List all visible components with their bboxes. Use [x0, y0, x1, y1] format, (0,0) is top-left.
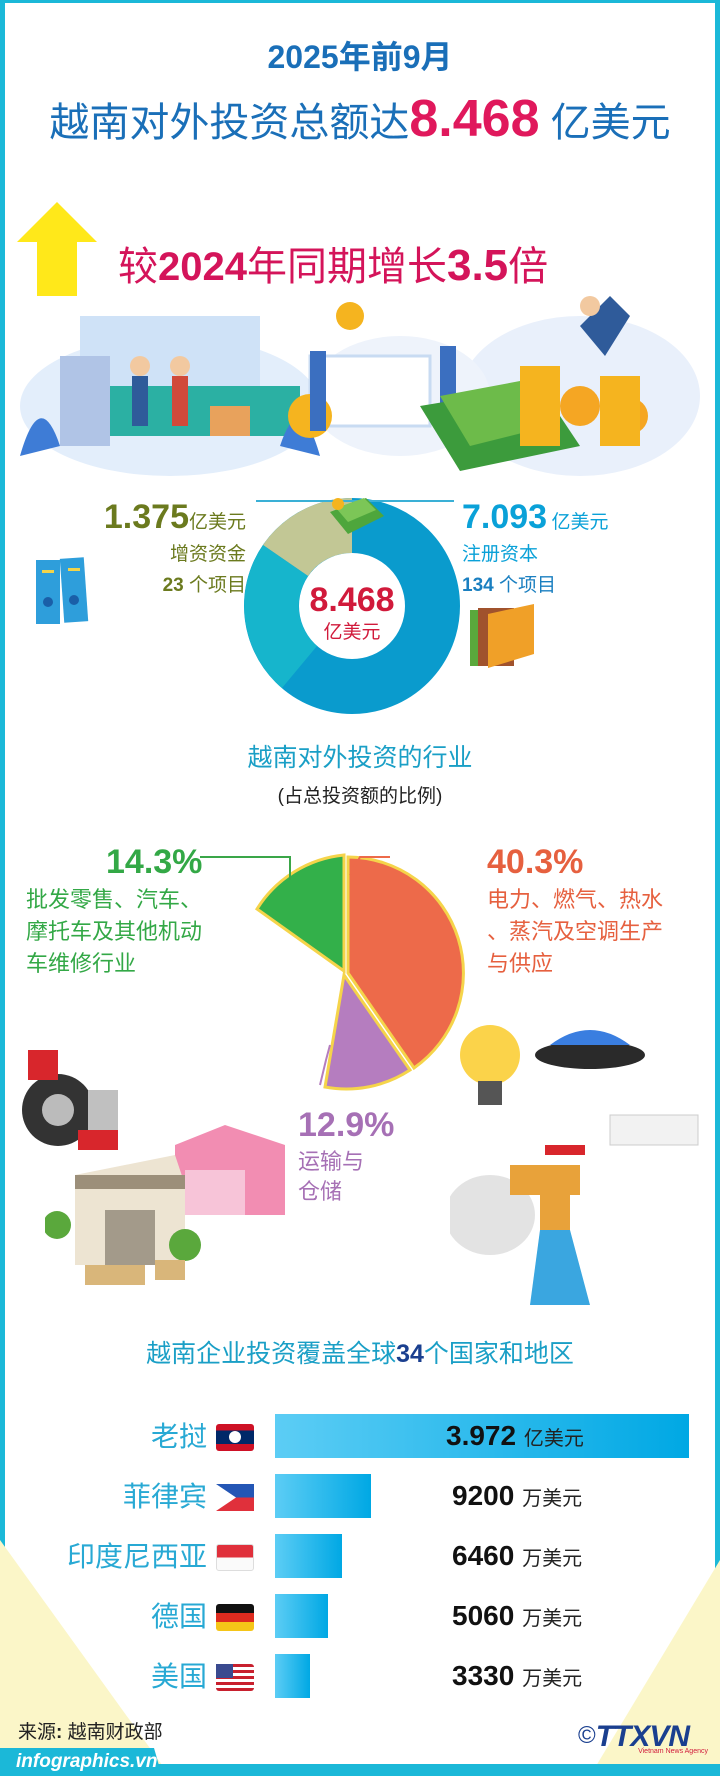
- row: Germany: [151, 1594, 582, 1638]
- right stat: registered capital: 134 个项目: [462, 575, 556, 596]
- donut center value: 亿美元: [323, 621, 381, 643]
- logo: TTXVN: ©TTXVN: [578, 1720, 689, 1753]
- icon: warehouse: [45, 1125, 285, 1285]
- label: transport 12.9%: 仓储: [298, 1179, 342, 1204]
- icon: folders: [470, 604, 534, 668]
- row: USA: 3330 万美元: [452, 1660, 582, 1691]
- right stat: registered capital: 7.093 亿美元: [462, 498, 609, 536]
- row: Indonesia: 印度尼西亚: [67, 1541, 207, 1572]
- label: electricity 40.3%: 与供应: [487, 951, 553, 976]
- label: transport 12.9%: 12.9%: [298, 1106, 394, 1144]
- leader lines: [200, 856, 390, 1086]
- growth headline: 较2024年同期增长3.5倍: [118, 241, 548, 290]
- right stat: registered capital: [462, 498, 609, 596]
- illustration: factory and money: [20, 296, 700, 476]
- bar chart: top countries: [67, 1414, 689, 1698]
- label: electricity 40.3%: [487, 843, 663, 976]
- footer bar: [0, 1764, 720, 1776]
- label: electricity 40.3%: 、蒸汽及空调生产: [487, 919, 663, 944]
- label: transport 12.9%: [298, 1106, 394, 1204]
- label: wholesale retail 14.3%: 批发零售、汽车、: [26, 887, 202, 912]
- row: Indonesia: 6460 万美元: [452, 1540, 582, 1571]
- row: USA: 美国: [151, 1661, 207, 1692]
- donut chart: [244, 498, 460, 714]
- connector line: [256, 500, 454, 502]
- left stat: capital increase: 增资资金: [170, 544, 246, 565]
- label: wholesale retail 14.3%: [26, 843, 202, 976]
- icon: yellow up arrow: [17, 202, 97, 296]
- left stat: capital increase: 23 个项目: [163, 575, 246, 596]
- pie chart: [255, 853, 465, 1090]
- label: wholesale retail 14.3%: 摩托车及其他机动: [26, 919, 202, 944]
- bottom decorative yellow triangles: [0, 1540, 720, 1764]
- row: Philippines: [123, 1474, 582, 1518]
- section heading: industries: 越南对外投资的行业: [247, 744, 472, 772]
- title: 越南对外投资总额达8.468 亿美元: [49, 90, 671, 148]
- icon: car parts: [22, 1050, 118, 1150]
- row: Philippines: 菲律宾: [123, 1481, 207, 1512]
- subheading: (占总投资额的比例): [278, 786, 442, 807]
- title: [49, 39, 671, 148]
- row: Philippines: 9200 万美元: [452, 1480, 582, 1511]
- label: wholesale retail 14.3%: 14.3%: [106, 843, 202, 881]
- row: Indonesia: [67, 1534, 582, 1578]
- icon: utilities: [450, 1025, 698, 1305]
- logo: TTXVN: Vietnam News Agency: [638, 1748, 708, 1755]
- left stat: capital increase: [104, 498, 246, 596]
- icon: money stack: [330, 498, 384, 534]
- row: Laos: [151, 1414, 689, 1458]
- left stat: capital increase: 1.375亿美元: [104, 498, 246, 536]
- row: Laos: 3.972 亿美元: [446, 1420, 584, 1451]
- row: USA: [151, 1654, 582, 1698]
- source: 来源: 越南财政部: [18, 1722, 163, 1743]
- footer tab: infographics.vn: infographics.vn: [16, 1751, 157, 1772]
- label: transport 12.9%: 运输与: [298, 1149, 364, 1174]
- label: electricity 40.3%: 电力、燃气、热水: [487, 887, 663, 912]
- section heading: 34 countries: 越南企业投资覆盖全球34个国家和地区: [146, 1340, 574, 1368]
- row: Germany: 5060 万美元: [452, 1600, 582, 1631]
- row: Laos: 老挝: [151, 1421, 207, 1452]
- label: wholesale retail 14.3%: 车维修行业: [26, 951, 136, 976]
- icon: binders: [36, 557, 88, 624]
- donut center value: [309, 581, 395, 643]
- right stat: registered capital: 注册资本: [462, 544, 538, 565]
- title: 2025年前9月: [268, 39, 452, 75]
- label: electricity 40.3%: 40.3%: [487, 843, 583, 881]
- donut center value: 8.468: [309, 581, 395, 619]
- row: Germany: 德国: [151, 1601, 207, 1632]
